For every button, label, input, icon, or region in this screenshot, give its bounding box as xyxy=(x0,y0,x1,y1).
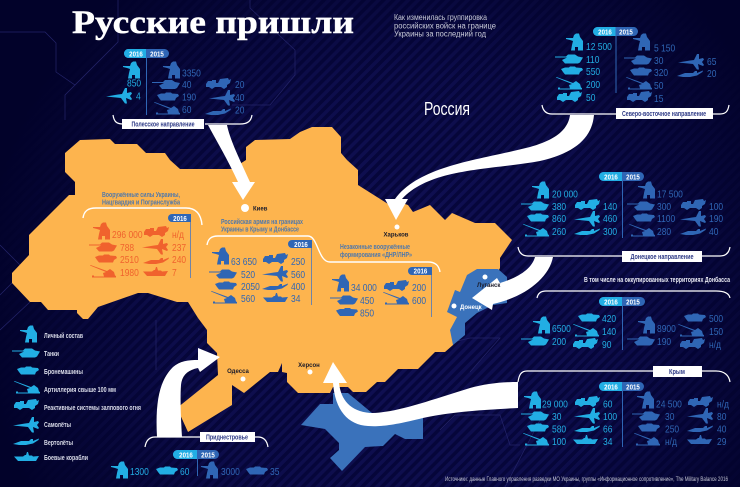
Donetsk 2016 figures: 860 xyxy=(552,213,566,224)
subtitle: Как изменилась группировка xyxy=(394,13,487,22)
DNR/LNR figures: 600 xyxy=(412,295,426,306)
city: Kharkiv xyxy=(384,224,409,238)
legend: Танки xyxy=(44,351,59,358)
year pill: 2015 xyxy=(626,384,640,392)
north-east 2016 figures: 50 xyxy=(586,92,595,103)
Ukrainian figures: 1980 xyxy=(120,267,139,278)
arrow: Polesie direction to Kyiv xyxy=(208,125,255,200)
Crimea 2015 figures: н/д xyxy=(665,436,677,447)
map: Crimea xyxy=(301,393,423,471)
ribbon: Crimea: Крым xyxy=(669,369,685,376)
ribbon: Transnistria xyxy=(200,432,255,442)
Donetsk 2015 figures: 100 xyxy=(709,201,723,212)
Crimea 2015 figures: 24 500 xyxy=(656,399,682,410)
year pill: 2016 xyxy=(598,29,612,37)
label: Russia: Россия xyxy=(424,99,470,119)
ribbon: north-east xyxy=(616,108,713,119)
city: Donetsk: Донецк xyxy=(460,305,482,311)
legend: Бронемашины xyxy=(44,369,83,376)
Russian army figures: 63 650 xyxy=(231,256,257,267)
Polesie 2015 figures: 40 xyxy=(182,79,191,90)
occupied 2016 figures: 6500 xyxy=(552,323,571,334)
Crimea 2016 figures: 34 xyxy=(603,436,612,447)
north-east 2015 figures: 20 xyxy=(707,68,716,79)
Ukrainian figures xyxy=(89,222,186,278)
heading: Ukrainian forces xyxy=(102,190,181,206)
Russian army figures: 250 xyxy=(291,256,305,267)
Russian army figures: 400 xyxy=(291,281,305,292)
heading: Ukrainian forces: Нацгвардия и Погранслужба xyxy=(102,198,181,206)
year pill xyxy=(599,382,644,392)
legend: Артиллерия свыше 100 мм xyxy=(44,387,116,394)
city: Donetsk xyxy=(452,304,482,311)
year flag: 2016 xyxy=(173,216,187,223)
Ukrainian figures: 788 xyxy=(120,242,134,253)
Russian army figures xyxy=(209,248,305,304)
Polesie 2015 figures xyxy=(152,62,244,116)
year pill xyxy=(593,27,638,37)
Transnistria 2016 figures: 1300 xyxy=(130,466,149,477)
Ukrainian figures: 2510 xyxy=(120,254,139,265)
Transnistria 2016 figures xyxy=(111,462,189,478)
Transnistria 2015 figures xyxy=(201,462,279,478)
legend: Реактивные системы залпового огня xyxy=(44,405,141,412)
panel: Russian army at the borders xyxy=(207,217,440,305)
panel: DNR/LNR formations xyxy=(330,242,432,319)
Ukrainian figures: 240 xyxy=(172,254,186,265)
Donetsk 2016 figures xyxy=(521,182,617,237)
north-east 2015 figures: 15 xyxy=(654,93,663,104)
occupied 2015 figures: 150 xyxy=(709,326,723,337)
city: Luhansk xyxy=(477,274,500,289)
legend: Вертолёты xyxy=(44,440,73,447)
city: Luhansk: Луганск xyxy=(477,283,500,289)
occupied 2015 figures xyxy=(627,313,723,350)
Donetsk 2015 figures: 300 xyxy=(657,201,671,212)
Crimea 2015 figures: 250 xyxy=(665,424,679,435)
ribbon: Polesie: Полесское направление xyxy=(132,122,195,128)
year pill: 2015 xyxy=(626,299,640,307)
ribbon: Crimea xyxy=(653,366,702,377)
heading: Russian army: Украины в Крыму и Донбассе xyxy=(221,224,299,234)
Crimea 2015 figures: н/д xyxy=(717,399,729,410)
subtitle: российских войск на границе xyxy=(394,22,497,30)
north-east 2015 figures: 50 xyxy=(654,80,663,91)
Polesie 2016 figures: 4 xyxy=(136,91,141,102)
city: Odesa xyxy=(227,369,249,382)
arrow: Donetsk direction xyxy=(472,257,553,310)
DNR/LNR figures: 850 xyxy=(360,308,374,319)
legend xyxy=(12,326,141,462)
Crimea 2016 figures: 60 xyxy=(603,399,612,410)
Transnistria 2015 figures: 35 xyxy=(270,466,279,477)
legend: Самолёты xyxy=(44,422,71,429)
city: Kyiv xyxy=(241,204,268,212)
Donetsk 2015 figures: 17 500 xyxy=(657,189,683,200)
ribbon: Donetsk: Донецкое направление xyxy=(630,254,694,261)
Crimea 2015 figures: 30 xyxy=(665,411,674,422)
Ukrainian figures: н/д xyxy=(172,229,184,240)
Ukrainian figures: 237 xyxy=(172,242,186,253)
year pill: 2015 xyxy=(150,51,164,59)
north-east 2015 figures: 5 150 xyxy=(654,43,675,54)
north-east 2016 figures: 12 500 xyxy=(586,41,612,52)
north-east 2015 figures: 65 xyxy=(707,56,716,67)
city: Odesa: Одесса xyxy=(227,369,249,375)
Polesie 2015 figures: 20 xyxy=(235,105,244,116)
north-east 2016 figures: 200 xyxy=(586,79,600,90)
ribbon: north-east: Северо-восточное направление xyxy=(622,111,706,118)
Donetsk 2016 figures: 20 000 xyxy=(552,189,578,200)
heading: Russian army: Российская армия на границах xyxy=(221,217,304,226)
year pill: 2016 xyxy=(604,299,618,307)
panel: occupied Donbas territories xyxy=(521,276,730,350)
Crimea 2016 figures: 30 xyxy=(552,411,561,422)
city: Kherson: Херсон xyxy=(298,363,320,369)
heading: Russian army xyxy=(221,217,304,234)
subtitle: Украины за последний год xyxy=(394,30,486,38)
Russian army figures: 560 xyxy=(241,293,255,304)
Russian army figures: 34 xyxy=(291,293,300,304)
legend: Личный состав xyxy=(44,332,84,340)
subtitle xyxy=(394,13,497,38)
year pill xyxy=(124,49,169,59)
city: Kherson xyxy=(298,363,320,374)
Donetsk 2015 figures: 40 xyxy=(709,226,718,237)
heading: illegal formations xyxy=(340,242,412,259)
occupied 2015 figures: 8900 xyxy=(657,323,676,334)
DNR/LNR figures: 34 000 xyxy=(351,282,377,293)
Donetsk 2016 figures: 460 xyxy=(603,213,617,224)
Crimea 2015 figures: 40 xyxy=(717,424,726,435)
heading: illegal formations: формирования «ДНР/ЛНР» xyxy=(340,250,412,259)
Crimea 2015 figures: 80 xyxy=(717,411,726,422)
ribbon: Transnistria: Приднестровье xyxy=(206,434,248,442)
year pill: 2015 xyxy=(619,29,633,37)
year pill xyxy=(599,297,645,307)
north-east 2015 figures: 320 xyxy=(654,67,668,78)
panel: Polesie direction xyxy=(106,49,252,129)
Crimea 2016 figures: 100 xyxy=(603,411,617,422)
Polesie 2015 figures: 60 xyxy=(182,104,191,115)
Crimea 2016 figures xyxy=(521,392,617,447)
panel: Transnistria xyxy=(111,432,279,478)
occupied 2016 figures: 420 xyxy=(602,313,616,324)
Donetsk 2016 figures: 260 xyxy=(552,226,566,237)
occupied 2016 figures: 140 xyxy=(602,326,616,337)
Polesie 2015 figures: 20 xyxy=(235,79,244,90)
year pill: 2015 xyxy=(201,452,215,460)
Polesie 2015 figures: 3350 xyxy=(182,68,201,79)
year pill: 2015 xyxy=(626,174,640,182)
occupied 2016 figures xyxy=(521,313,616,350)
Crimea 2015 figures xyxy=(632,392,729,447)
north-east 2016 figures: 110 xyxy=(586,54,599,65)
Donetsk 2015 figures: 1100 xyxy=(657,213,675,224)
heading: Ukrainian forces: Вооружённые силы Украины, xyxy=(102,190,180,199)
year flag: 2016 xyxy=(294,242,308,249)
Crimea 2015 figures: 29 xyxy=(717,436,726,447)
Polesie 2016 figures xyxy=(106,62,141,104)
panel: Crimea direction xyxy=(518,366,730,447)
Donetsk 2015 figures: 280 xyxy=(657,226,671,237)
Donetsk 2016 figures: 140 xyxy=(603,201,617,212)
Transnistria 2015 figures: 3000 xyxy=(221,466,240,477)
year flag xyxy=(288,240,312,249)
Transnistria 2016 figures: 60 xyxy=(180,466,189,477)
Polesie 2016 figures: 850 xyxy=(127,78,141,89)
occupied 2016 figures: 200 xyxy=(552,336,566,347)
occupied 2015 figures: 500 xyxy=(709,313,723,324)
arrow: Transnistria direction to Odesa xyxy=(157,348,220,437)
Donetsk 2015 figures: 190 xyxy=(709,213,723,224)
Donetsk 2015 figures xyxy=(627,182,723,237)
Russian army figures: 560 xyxy=(291,269,305,280)
legend: Боевые корабли xyxy=(44,454,88,462)
city: Kyiv: Киев xyxy=(253,206,268,212)
panel: Donetsk direction xyxy=(518,172,730,262)
occupied 2015 figures: 190 xyxy=(657,336,671,347)
Ukrainian figures: 7 xyxy=(172,267,177,278)
Polesie 2015 figures: 190 xyxy=(182,92,196,103)
Russian army figures: 520 xyxy=(241,269,255,280)
city: Kharkiv: Харьков xyxy=(384,232,409,238)
year pill: 2016 xyxy=(604,174,618,182)
north-east 2015 figures: 30 xyxy=(654,55,663,66)
title: Русские пришли xyxy=(72,5,354,41)
occupied 2015 figures: н/д xyxy=(709,339,721,350)
arrow: north-east direction to Kharkiv xyxy=(385,115,594,220)
year pill xyxy=(173,450,219,460)
occupied 2016 figures: 90 xyxy=(602,339,611,350)
ribbon: Donetsk xyxy=(622,251,702,262)
Donetsk 2016 figures: 300 xyxy=(603,226,617,237)
ribbon: Polesie xyxy=(122,119,204,129)
year pill xyxy=(599,172,644,182)
map: occupied Donbas xyxy=(447,269,507,345)
Donetsk 2016 figures: 380 xyxy=(552,201,566,212)
year pill: 2016 xyxy=(129,51,143,59)
DNR/LNR figures xyxy=(330,274,426,319)
Russian army figures: 2050 xyxy=(241,281,260,292)
map: Ukraine mainland xyxy=(12,127,512,432)
north-east 2016 figures xyxy=(555,34,612,103)
north-east 2015 figures xyxy=(624,34,716,104)
year pill: 2016 xyxy=(179,452,193,460)
Crimea 2016 figures: 580 xyxy=(552,424,566,435)
Crimea 2016 figures: 29 000 xyxy=(542,399,568,410)
Crimea 2016 figures: 100 xyxy=(552,436,566,447)
arrow: Crimea direction to Kherson xyxy=(323,362,518,426)
Ukrainian figures: 296 000 xyxy=(112,229,143,240)
Polesie 2015 figures: 40 xyxy=(235,92,244,103)
year pill: 2016 xyxy=(604,384,618,392)
heading: illegal formations: Незаконные вооружённые xyxy=(340,242,410,251)
panel: Ukrainian armed forces xyxy=(83,190,202,278)
panel: north-east direction xyxy=(542,27,729,119)
Crimea 2016 figures: 66 xyxy=(603,424,612,435)
DNR/LNR figures: 450 xyxy=(360,295,374,306)
year flag: 2016 xyxy=(414,268,428,276)
DNR/LNR figures: 200 xyxy=(412,282,426,293)
north-east 2016 figures: 550 xyxy=(586,66,600,77)
